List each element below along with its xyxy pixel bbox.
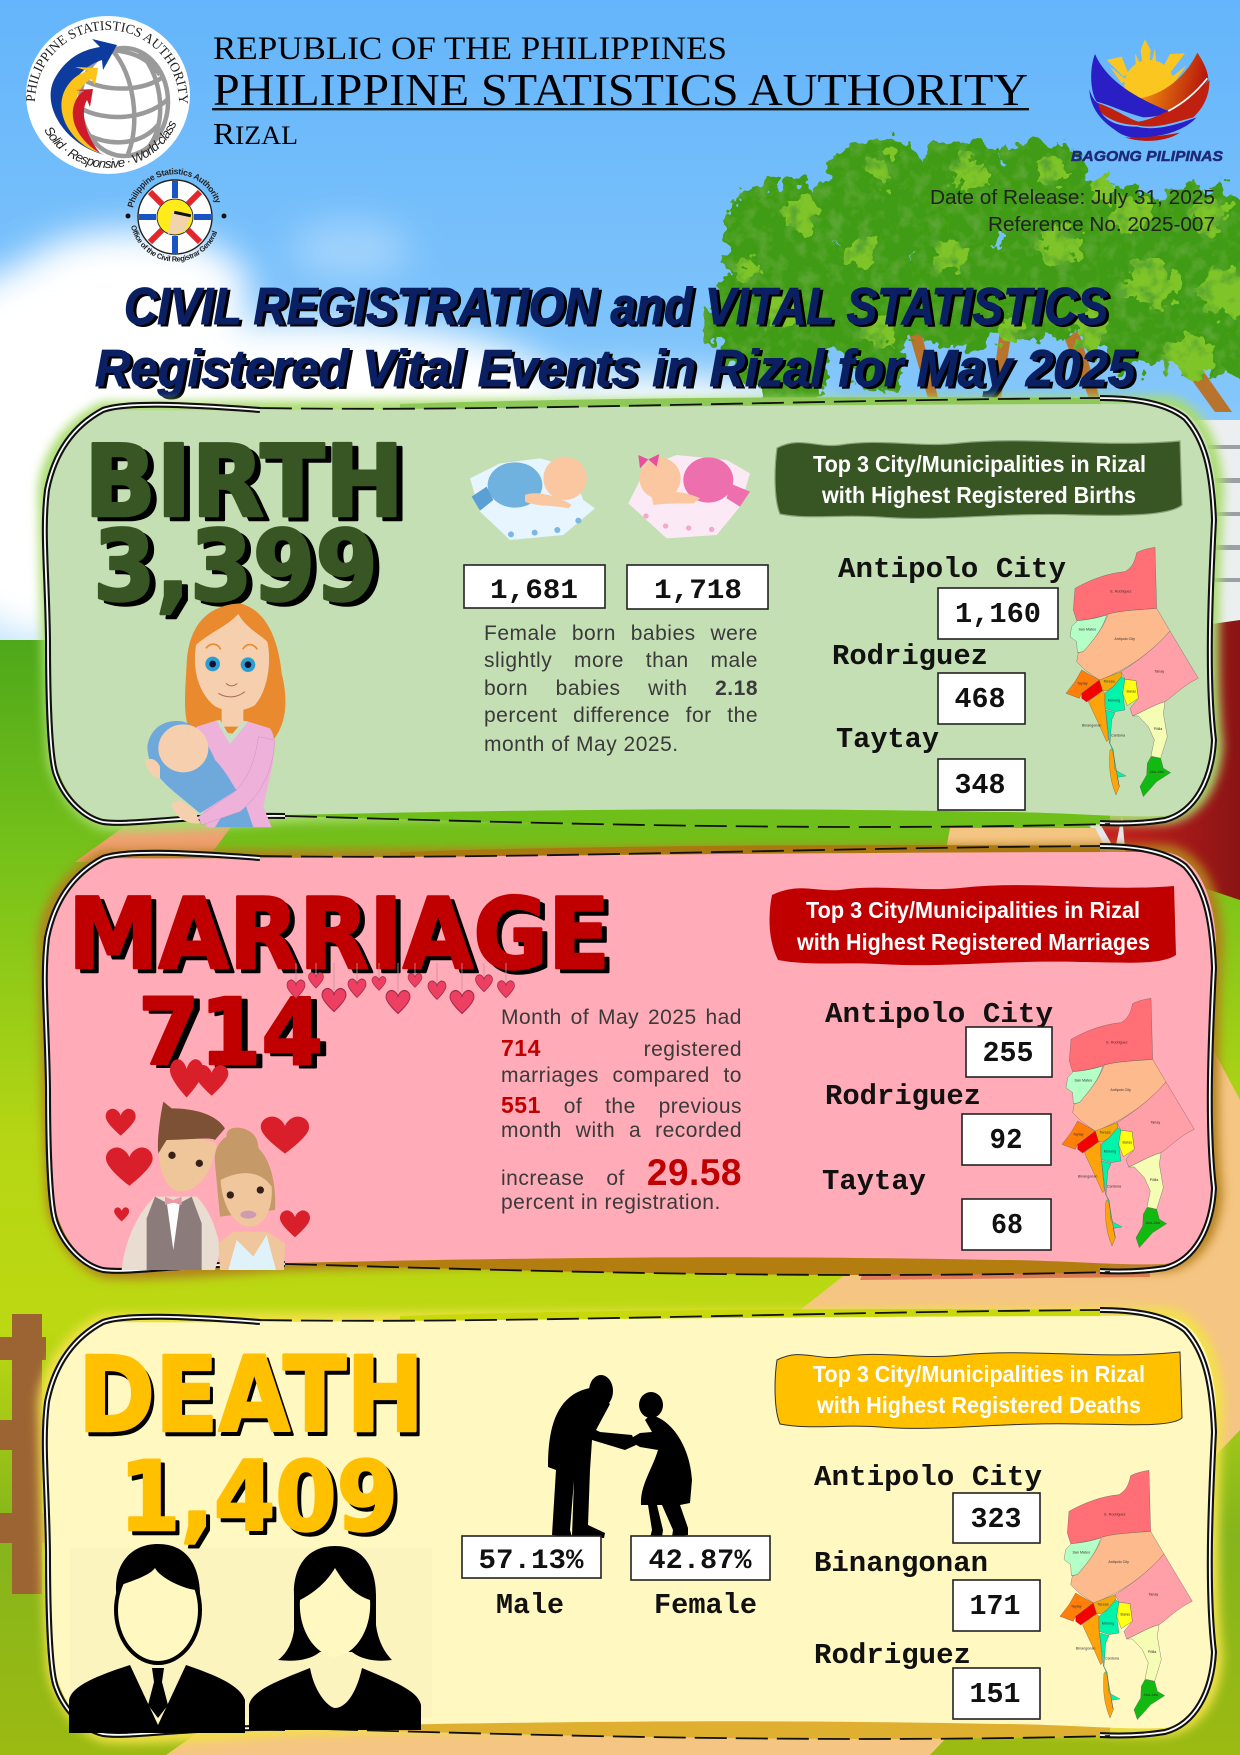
text: birth summary: month of May 2025. <box>484 733 679 756</box>
list: top 3 cities marriages: 255 <box>982 1037 1034 1070</box>
text: birth summary: born babies with 2.18 <box>484 677 758 700</box>
list: top 3 cities deaths <box>814 1461 1042 1719</box>
map: Rizal province: Pililla <box>1148 1650 1157 1654</box>
stat box: male deaths: 57.13% <box>478 1546 584 1577</box>
total: births: 3,399 <box>93 510 378 624</box>
banner: top 3 deaths <box>775 1352 1182 1428</box>
stat box: male deaths: Male <box>496 1589 564 1622</box>
banner: top 3 marriages: Top 3 City/Municipalities in Rizal <box>806 897 1140 923</box>
logo: Office of the Civil Registrar General seal <box>126 168 226 262</box>
list: top 3 cities marriages: Rodriguez <box>825 1080 981 1113</box>
stat box: female deaths: 42.87% <box>648 1546 752 1577</box>
header: agency name: PHILIPPINE STATISTICS AUTHORITY <box>213 64 1028 115</box>
map: Rizal province: Pililla <box>1154 727 1163 731</box>
illustration: couple with hearts <box>106 1059 310 1270</box>
release date and reference number: Reference No. 2025-007 <box>988 214 1215 236</box>
map: Rizal province: Taytay <box>1077 682 1088 686</box>
stat box: male births: 1,681 <box>490 576 578 607</box>
map: Rizal province: Pililla <box>1150 1178 1159 1182</box>
banner: top 3 deaths: with Highest Registered Deaths <box>816 1392 1141 1418</box>
text: marriage summary: marriages compared to <box>501 1064 742 1087</box>
map: Rizal province: Tanay <box>1150 1120 1160 1124</box>
map: Rizal province: Jala-Jala <box>1145 1221 1161 1225</box>
header: agency name: REPUBLIC OF THE PHILIPPINES <box>213 31 727 67</box>
list: top 3 cities marriages <box>822 998 1053 1250</box>
map: Rizal province: Antipolo City <box>1108 1560 1129 1564</box>
stat box: female deaths: Female <box>654 1589 757 1622</box>
list: top 3 cities deaths: Antipolo City <box>814 1461 1042 1494</box>
icon: male and female silhouettes <box>69 1544 432 1733</box>
map: Rizal province: E. Rodriguez <box>1104 1512 1126 1516</box>
map: Rizal province: Baras <box>1121 1613 1130 1617</box>
banner: top 3 births: with Highest Registered Births <box>821 482 1136 508</box>
map: Rizal province: Taytay <box>1071 1605 1082 1609</box>
list: top 3 cities births: 1,160 <box>955 598 1041 631</box>
panel: marriage <box>45 845 1216 1275</box>
panel: birth <box>45 397 1216 827</box>
map: Rizal province: Antipolo City <box>1110 1088 1131 1092</box>
heading: DEATH: DEATH <box>78 1334 424 1456</box>
map: Rizal province: Teresa <box>1100 1130 1111 1134</box>
map: Rizal province: Cardona <box>1105 1657 1120 1661</box>
stat box: male deaths <box>462 1536 601 1622</box>
map: Rizal province: Taytay <box>1073 1133 1084 1137</box>
text: marriage summary: 551 of the previous <box>501 1092 742 1118</box>
stat box: female deaths <box>631 1536 770 1622</box>
map: Rizal province: Binangonan <box>1078 1175 1097 1179</box>
heading: MARRIAGE: MARRIAGE <box>68 878 610 992</box>
release date and reference number <box>930 187 1215 236</box>
header: agency name: RIZAL <box>213 116 298 151</box>
logo: Office of the Civil Registrar General seal: Office of the Civil Registrar General <box>132 226 217 262</box>
illustration: mother holding baby <box>145 603 285 827</box>
list: top 3 cities deaths: Binangonan <box>814 1547 988 1580</box>
text: marriage summary: month with a recorded <box>501 1119 742 1142</box>
release date and reference number: Date of Release: July 31, 2025 <box>930 187 1215 209</box>
text: marriage summary <box>501 1000 742 1230</box>
logo: Philippine Statistics Authority seal <box>26 16 190 174</box>
map: Rizal province: Tanay <box>1148 1592 1158 1596</box>
map: Rizal province: Morong <box>1102 1621 1114 1625</box>
logo: Philippine Statistics Authority seal: Solid · Responsive · World-class <box>45 121 176 168</box>
map: Rizal province: San Mateo <box>1072 1551 1090 1555</box>
list: top 3 cities deaths: Rodriguez <box>814 1639 971 1672</box>
title: CIVIL REGISTRATION and VITAL STATISTICS <box>124 278 1108 336</box>
list: top 3 cities deaths: 171 <box>970 1590 1020 1623</box>
illustration: baby boy and baby girl <box>470 454 750 540</box>
text: birth summary: Female born babies were <box>484 622 758 645</box>
map: Rizal province: Morong <box>1104 1149 1116 1153</box>
map: Rizal province: Morong <box>1108 698 1120 702</box>
list: top 3 cities births: 348 <box>954 769 1006 802</box>
list: top 3 cities births: Antipolo City <box>838 553 1066 586</box>
list: top 3 cities marriages: Taytay <box>822 1165 926 1198</box>
panel: death <box>45 1309 1216 1739</box>
map: Rizal province: E. Rodriguez <box>1110 589 1132 593</box>
banner: top 3 births <box>775 441 1182 518</box>
banner: top 3 marriages: with Highest Registered Marriages <box>796 929 1150 955</box>
text: birth summary: percent difference for the <box>484 704 758 727</box>
map: Rizal province: E. Rodriguez <box>1106 1040 1128 1044</box>
map: Rizal province: Antipolo City <box>1114 637 1135 641</box>
list: top 3 cities births: 468 <box>954 683 1006 716</box>
map: Rizal province <box>1066 547 1198 797</box>
map: Rizal province: Tanay <box>1154 669 1164 673</box>
map: Rizal province: Teresa <box>1098 1602 1109 1606</box>
total: deaths: 1,409 <box>119 1441 398 1553</box>
text: marriage summary: percent in registration. <box>501 1191 721 1214</box>
text: birth summary: slightly more than male <box>484 649 758 672</box>
map: Rizal province: Cardona <box>1107 1185 1122 1189</box>
map: Rizal province: Teresa <box>1104 679 1115 683</box>
banner: top 3 marriages <box>770 885 1176 965</box>
map: Rizal province: Jala-Jala <box>1143 1693 1159 1697</box>
map: Rizal province: Jala-Jala <box>1149 770 1165 774</box>
map: Rizal province: Baras <box>1123 1141 1132 1145</box>
list: top 3 cities births: Taytay <box>836 723 939 756</box>
list: top 3 cities marriages: Antipolo City <box>825 998 1053 1031</box>
illustration: hanging hearts garland <box>287 963 514 1014</box>
total: marriages: 714 <box>138 979 323 1086</box>
map: Rizal province <box>1062 998 1194 1248</box>
logo: Bagong Pilipinas: BAGONG PILIPINAS <box>1071 148 1223 165</box>
text: birth summary <box>484 618 758 768</box>
list: top 3 cities deaths: 323 <box>970 1503 1022 1536</box>
logo: Philippine Statistics Authority seal: PHILIPPINE STATISTICS AUTHORITY <box>26 21 188 104</box>
map: Rizal province: Binangonan <box>1082 724 1101 728</box>
banner: top 3 births: Top 3 City/Municipalities in Rizal <box>813 451 1146 477</box>
map: Rizal province: Cardona <box>1111 734 1126 738</box>
logo: Office of the Civil Registrar General seal: Philippine Statistics Authority <box>127 168 220 208</box>
list: top 3 cities marriages: 68 <box>991 1209 1023 1242</box>
text: marriage summary: increase of 29.58 <box>501 1152 742 1193</box>
list: top 3 cities deaths: 151 <box>970 1678 1020 1711</box>
title <box>95 278 1136 398</box>
title: Registered Vital Events in Rizal for May 2025 <box>95 340 1136 398</box>
list: top 3 cities births <box>832 553 1066 810</box>
logo: Bagong Pilipinas <box>1071 39 1223 165</box>
map: Rizal province: San Mateo <box>1078 628 1096 632</box>
map: Rizal province: Binangonan <box>1076 1647 1095 1651</box>
header: agency name <box>212 31 1029 151</box>
icon: elderly couple silhouette <box>548 1375 692 1538</box>
banner: top 3 deaths: Top 3 City/Municipalities in Rizal <box>813 1361 1145 1387</box>
stat box: female births: 1,718 <box>654 576 742 607</box>
map: Rizal province: San Mateo <box>1074 1079 1092 1083</box>
map: Rizal province <box>1060 1470 1192 1720</box>
heading: BIRTH: BIRTH <box>84 423 404 540</box>
list: top 3 cities births: Rodriguez <box>832 640 988 673</box>
text: marriage summary: 714 registered <box>501 1035 742 1061</box>
list: top 3 cities marriages: 92 <box>990 1124 1022 1157</box>
map: Rizal province: Baras <box>1127 690 1136 694</box>
stat box: male births <box>464 565 605 608</box>
stat box: female births <box>627 565 768 609</box>
text: marriage summary: Month of May 2025 had <box>501 1006 742 1029</box>
